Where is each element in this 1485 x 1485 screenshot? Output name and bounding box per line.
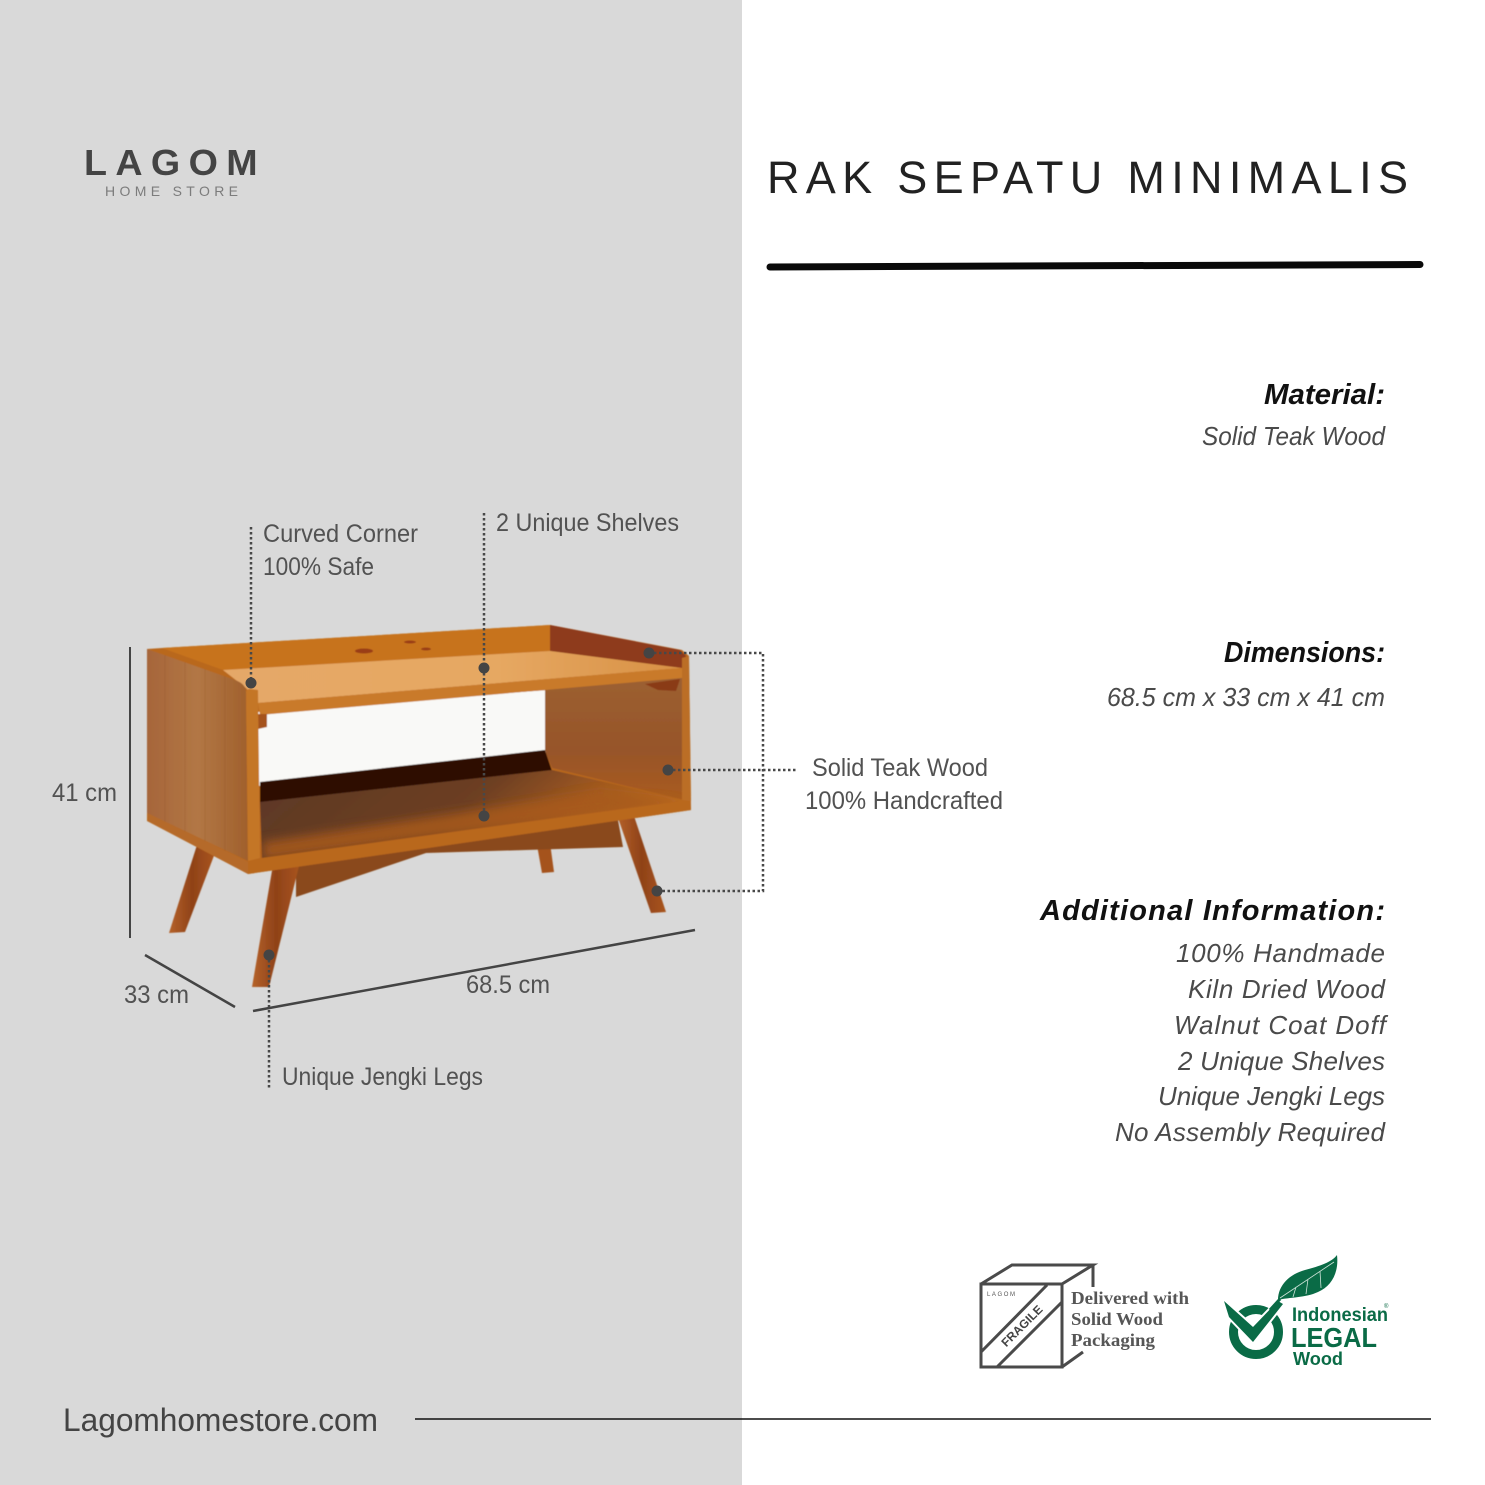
text block: material: Solid Teak Wood [1202, 421, 1386, 451]
lower back rail [260, 750, 552, 804]
packaging note: Solid Wood [1071, 1309, 1163, 1329]
dimension label: height: 41 cm [52, 779, 117, 807]
icon: fragile packaging box [981, 1265, 1093, 1367]
bottom front edge [248, 800, 691, 874]
callout: solid teak wood: 100% Handcrafted [805, 787, 1003, 815]
packaging note [1071, 1288, 1189, 1350]
callout: solid teak wood [644, 648, 1003, 896]
bottom shelf front glow [263, 792, 684, 860]
callout: jengki legs: Unique Jengki Legs [282, 1063, 483, 1091]
right front edge [682, 656, 691, 801]
left panel grain [165, 655, 225, 851]
text block: dimensions [1107, 637, 1385, 712]
callout: curved corner: Curved Corner [263, 520, 418, 548]
left side panel [147, 649, 248, 861]
back leg [537, 843, 554, 873]
text block: material: Material: [1264, 379, 1385, 411]
badge: Indonesian Legal Wood: ® [1384, 1303, 1389, 1310]
text block: additional information: Walnut Coat Doff [1174, 1010, 1389, 1040]
bottom shelf [260, 770, 684, 858]
leg brace [296, 815, 623, 897]
right inner panel [545, 676, 684, 800]
text block: dimensions: 68.5 cm x 33 cm x 41 cm [1107, 682, 1385, 712]
logo: Lagom Home Store [84, 142, 266, 199]
cabinet silhouette backing [147, 625, 691, 874]
footer rule [415, 1418, 1431, 1420]
shelf bracket left [258, 714, 267, 729]
rear left leg [169, 845, 215, 933]
callout: curved corner: 100% Safe [263, 553, 374, 581]
callout: jengki legs [264, 950, 483, 1091]
logo: Lagom Home Store: LAGOM [84, 142, 266, 183]
text block: dimensions: Dimensions: [1224, 637, 1385, 669]
left panel front edge [246, 689, 260, 861]
badge: Indonesian Legal Wood: Indonesian [1292, 1305, 1388, 1326]
back rail knots [355, 640, 431, 654]
badge: Indonesian Legal Wood: LEGAL [1291, 1322, 1377, 1353]
top shelf front edge [258, 668, 682, 715]
text block: additional information: 2 Unique Shelves [1177, 1046, 1385, 1076]
packaging note: Delivered with [1071, 1288, 1189, 1308]
dimension line: depth [145, 955, 235, 1007]
text block: additional information: Kiln Dried Wood [1188, 974, 1387, 1004]
dimension label: width: 68.5 cm [466, 971, 550, 999]
icon: fragile packaging box: LAGOM [987, 1292, 1015, 1298]
callout: curved corner [246, 520, 418, 688]
badge: Indonesian Legal Wood [1224, 1255, 1389, 1369]
left panel bottom strip [147, 813, 248, 874]
text block: additional information: 100% Handmade [1176, 938, 1385, 968]
icon: fragile packaging box: FRAGILE [998, 1302, 1046, 1350]
panel: grey left background [0, 0, 742, 1485]
shelf bracket right [645, 679, 680, 691]
footer website: Lagomhomestore.com [63, 1402, 378, 1438]
text block: additional information [1039, 895, 1389, 1147]
callout: unique shelves: 2 Unique Shelves [496, 509, 679, 537]
upper back rail [162, 625, 550, 670]
logo: Lagom Home Store: HOME STORE [105, 183, 238, 199]
top shelf surface [223, 651, 682, 703]
badge: Indonesian Legal Wood: Wood [1293, 1349, 1343, 1369]
product illustration: teak shoe rack [147, 625, 691, 987]
text block: additional information: Unique Jengki Legs [1158, 1081, 1385, 1111]
center front leg [252, 862, 300, 987]
title underline [770, 264, 1420, 267]
packaging note: Packaging [1071, 1330, 1155, 1350]
title: RAK SEPATU MINIMALIS [767, 152, 1408, 203]
right front leg [617, 813, 666, 913]
text block: additional information: Additional Information: [1039, 895, 1385, 927]
dimension label: depth: 33 cm [124, 981, 189, 1009]
callout: unique shelves [478, 509, 679, 822]
text block: material [1202, 379, 1386, 451]
upper right rail [550, 625, 686, 668]
dimension line: width [253, 930, 695, 1011]
callout: solid teak wood: Solid Teak Wood [812, 754, 988, 782]
text block: additional information: No Assembly Required [1115, 1117, 1387, 1147]
dimension line: height [129, 647, 131, 938]
open white compartment [258, 690, 548, 786]
